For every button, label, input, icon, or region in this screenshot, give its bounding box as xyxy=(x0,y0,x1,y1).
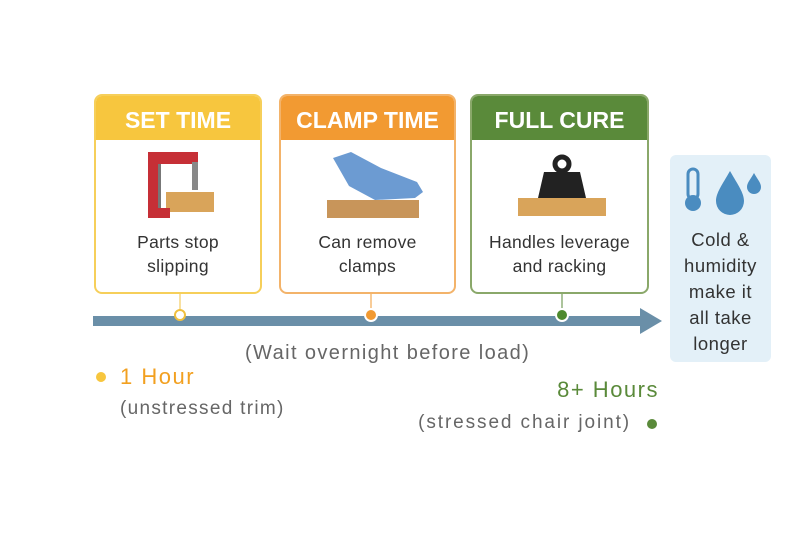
heading: set time: SET TIME xyxy=(125,107,231,133)
text: make it xyxy=(689,281,752,302)
caption: (Wait overnight before load) xyxy=(245,342,530,364)
icon: weight on wood xyxy=(518,154,606,216)
heading: set time xyxy=(96,96,260,140)
text: and racking xyxy=(513,256,606,276)
text xyxy=(137,232,219,276)
heading: clamp time: CLAMP TIME xyxy=(296,107,439,133)
side note box xyxy=(670,155,771,362)
heading: clamp time xyxy=(281,96,454,140)
text: all take xyxy=(689,307,752,328)
text: slipping xyxy=(147,256,209,276)
label: 1 hour: (unstressed trim) xyxy=(120,398,285,419)
timeline arrow xyxy=(93,294,662,334)
heading: full cure: FULL CURE xyxy=(495,107,624,133)
card: set time xyxy=(94,94,262,294)
icon: hand on wood xyxy=(327,152,423,218)
text xyxy=(489,232,630,276)
text: Handles leverage xyxy=(489,232,630,252)
text xyxy=(684,229,757,354)
label: 8+ hours xyxy=(418,377,659,433)
text xyxy=(318,232,417,276)
label: 8+ hours: (stressed chair joint) xyxy=(418,412,631,433)
text: Can remove xyxy=(318,232,417,252)
card: full cure xyxy=(470,94,649,294)
label: 1 hour: 1 Hour xyxy=(120,364,195,389)
card: clamp time xyxy=(279,94,456,294)
label: 8+ hours: 8+ Hours xyxy=(557,377,659,402)
text: longer xyxy=(693,333,748,354)
heading: full cure xyxy=(472,96,647,140)
text: humidity xyxy=(684,255,757,276)
text: Parts stop xyxy=(137,232,219,252)
icons: thermometer and drops xyxy=(685,168,761,215)
text: clamps xyxy=(339,256,396,276)
icon: clamp xyxy=(148,152,214,218)
text: Cold & xyxy=(691,229,750,250)
label: 1 hour xyxy=(96,364,285,419)
